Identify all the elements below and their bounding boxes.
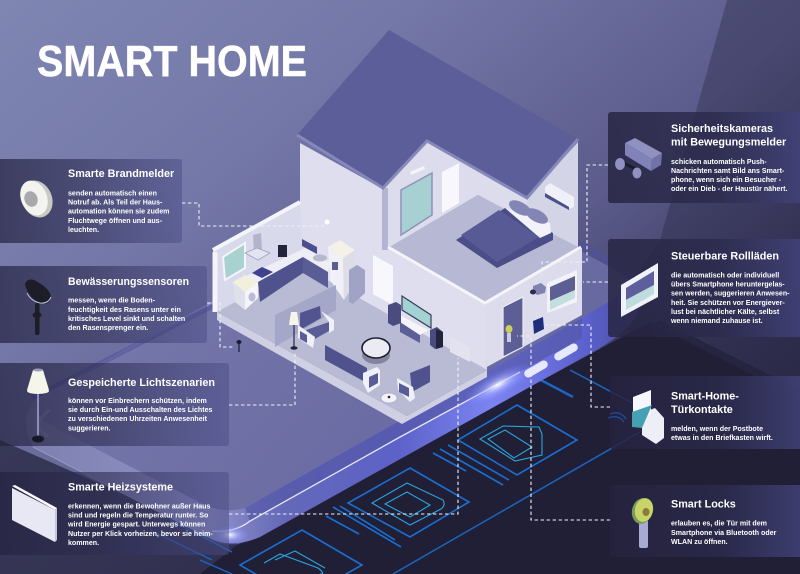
icon: window app tile: [326, 468, 469, 547]
text block: schicken automatisch Push-: [671, 158, 767, 166]
phone screen with app icons: [150, 370, 640, 574]
panel: Steuerbare Rollläden: [608, 239, 800, 337]
kitchen window: [223, 243, 245, 280]
heading: Smart-Home-: [671, 390, 739, 402]
cooker hood: [245, 233, 270, 260]
text block: senden automatisch einen: [68, 190, 157, 198]
washing machine: [233, 275, 258, 310]
text block: lust bei nächtlicher Kälte, selbst: [671, 308, 780, 316]
icon: radiator: [12, 485, 57, 542]
text block: melden, wenn der Postbote: [671, 425, 763, 433]
text block: kritisches Level sinkt und schalten: [68, 315, 185, 323]
sink: [313, 254, 327, 262]
upper floor: [388, 195, 581, 303]
back walls: [213, 143, 487, 370]
text block: Fluchtwege öffnen und aus-: [68, 217, 163, 225]
icon: window with shutter: [621, 263, 658, 317]
upper walls: [382, 142, 578, 250]
floor lamp: [289, 312, 299, 350]
text block: WLAN zu öffnen.: [671, 538, 728, 546]
icon: house app tile: [433, 405, 577, 485]
radiator: [450, 337, 470, 362]
wall air conditioner: [545, 183, 574, 210]
text block: [671, 158, 787, 193]
icon: security camera: [615, 138, 662, 178]
phone buttons: [523, 342, 579, 379]
security camera on wall: [530, 283, 546, 295]
text block: können vor Einbrechern schützen, indem: [68, 397, 207, 405]
ground slab: [217, 265, 487, 424]
phone body: [26, 170, 642, 546]
icon: smoke detector: [15, 176, 58, 222]
icon: book app tile: [240, 530, 362, 574]
coffee machine: [278, 245, 287, 257]
text block: [670, 272, 790, 325]
edge highlight: [212, 372, 520, 531]
text block: sind und regeln die Temperatur runter. So: [68, 512, 209, 520]
text block: Nachrichten samt Bild ans Smart-: [671, 167, 785, 175]
text block: leuchten.: [68, 226, 99, 234]
text block: übers Smartphone heruntergelas-: [671, 281, 785, 289]
cabinets: [258, 257, 328, 302]
heading: Smarte Brandmelder: [68, 168, 175, 180]
heading: Smart Locks: [671, 498, 736, 510]
irrigation sensor marker: [236, 340, 242, 352]
text block: feuchtigkeit des Rasens unter ein: [68, 306, 181, 314]
text block: erlauben es, die Tür mit dem: [671, 520, 767, 528]
text block: kommen.: [68, 539, 99, 547]
fridge: [328, 240, 355, 300]
bed: [456, 197, 553, 268]
text block: [68, 297, 185, 332]
roof: [297, 30, 578, 198]
stove: [252, 267, 273, 278]
cupboard: [349, 265, 365, 304]
counter top: [232, 248, 330, 292]
panel: Smarte Heizsysteme: [0, 472, 229, 555]
upper door: [442, 163, 459, 213]
text block: [68, 190, 169, 234]
icon: door contact with letter: [608, 390, 664, 444]
upper window: [401, 166, 432, 235]
text block: Smartphone via Bluetooth oder: [671, 529, 777, 537]
text block: automation können sie zudem: [68, 208, 169, 216]
text block: Notruf ab. Als Teil der Haus-: [68, 199, 163, 207]
text block: [68, 397, 213, 432]
heading: Steuerbare Rollläden: [671, 250, 779, 262]
text block: [67, 502, 213, 547]
text block: sie durch Ein-und Ausschalten des Lichtes: [68, 406, 213, 414]
text block: etwas in den Briefkasten wirft.: [671, 434, 773, 442]
text block: wenn niemand zuhause ist.: [670, 317, 763, 325]
text block: suggerieren.: [68, 424, 111, 432]
heading: Türkontakte: [671, 404, 733, 416]
living room door: [373, 255, 393, 305]
heading: mit Bewegungsmelder: [671, 137, 787, 149]
icon: irrigation sensor: [25, 280, 51, 335]
icon: floor lamp: [27, 368, 49, 442]
text block: Nutzer per Klick vorheizen, bevor sie heim-: [68, 530, 213, 538]
door and window on front wall: [503, 270, 577, 357]
armchair back: [298, 306, 334, 348]
house: [213, 30, 582, 424]
icon: smart lock: [630, 496, 655, 548]
smart lock on door: [506, 325, 512, 342]
kitchen: [223, 233, 365, 310]
door contact: [533, 317, 544, 334]
connector lines: [182, 165, 610, 520]
heading: [671, 123, 787, 149]
smoke detector marker: [324, 220, 330, 224]
tv and speakers: [388, 296, 443, 349]
heading: Gespeicherte Lichtszenarien: [68, 377, 215, 389]
text block: [671, 520, 777, 546]
round table: [362, 338, 390, 364]
front wall: [485, 248, 582, 368]
panel: Smart Locks: [610, 485, 800, 557]
panel: Gespeicherte Lichtszenarien: [0, 363, 229, 446]
panel: Smarte Brandmelder: [0, 159, 182, 243]
panel: Smart-Home-Türkontakte: [608, 376, 800, 449]
armchair front: [397, 365, 430, 402]
text block: heit. Sie schützen vor Energiever-: [671, 299, 785, 307]
text block: den Rasensprenger ein.: [68, 324, 148, 332]
text block: sen werden, suggerieren Anwesen-: [671, 290, 790, 298]
heading: [671, 390, 739, 416]
heading: Smarte Heizsysteme: [68, 482, 173, 494]
text block: die automatisch oder individuell: [671, 272, 779, 280]
panel: Sicherheitskameras: [608, 112, 800, 203]
icon: screen line pattern: [150, 370, 640, 574]
panel: Bewässerungssensoren: [0, 266, 207, 343]
microwave: [302, 239, 317, 254]
heading: Sicherheitskameras: [671, 123, 773, 135]
partition wall: [275, 285, 336, 347]
text block: erkennen, wenn die Bewohner außer Haus: [68, 502, 210, 510]
text block: phone, wenn sich ein Besucher -: [671, 176, 782, 184]
title: SMART HOME: [37, 37, 307, 86]
sofa: [325, 345, 380, 393]
robot vacuum: [381, 393, 397, 403]
text block: [671, 425, 773, 442]
text block: messen, wenn die Boden-: [68, 297, 156, 305]
text block: zu verschiedenen Uhrzeiten Anwesenheit: [68, 415, 208, 423]
heading: Bewässerungssensoren: [68, 276, 189, 288]
text block: oder ein Dieb - der Haustür nähert.: [671, 185, 787, 193]
text block: wird Energie gespart. Unterwegs können: [67, 521, 205, 529]
